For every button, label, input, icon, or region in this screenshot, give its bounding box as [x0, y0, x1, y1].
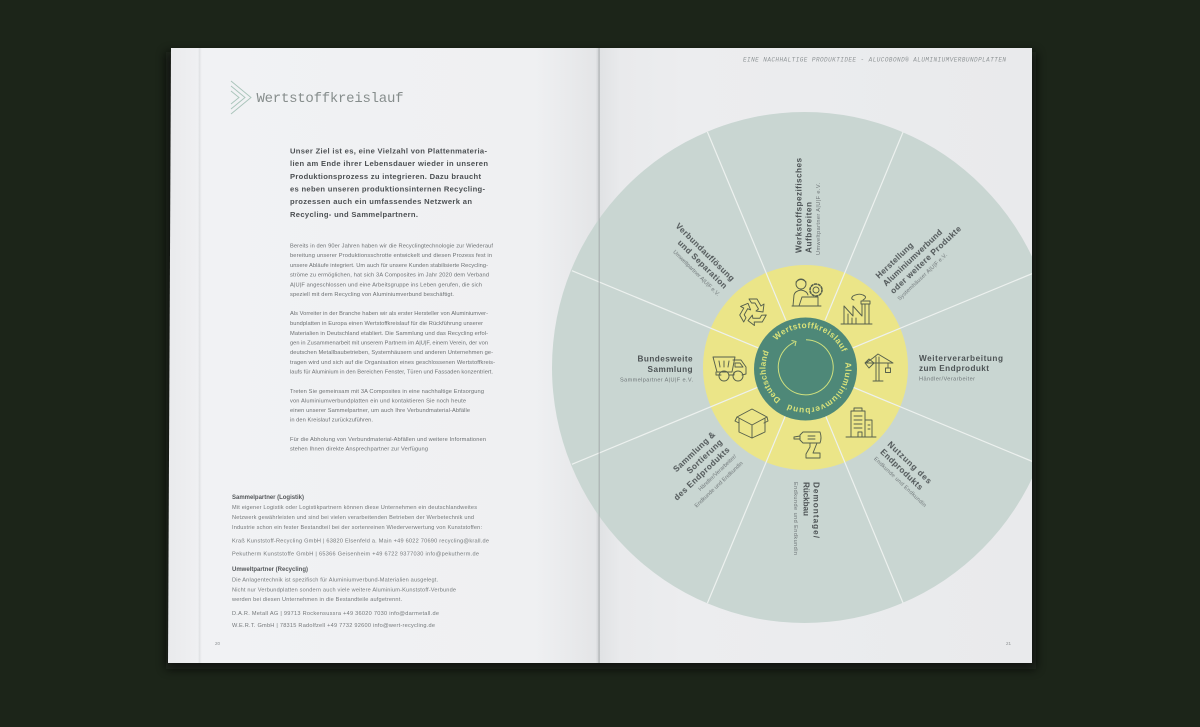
book spine [599, 48, 600, 663]
text block: lead paragraph: Produktionsprozess zu integrieren. Dazu braucht [290, 172, 481, 181]
text block: body copy: gen in Zusammenarbeit mit unserem Partnern im A|U|F, einem Verein, der von [290, 340, 488, 346]
ring label: Wertstoffkreislauf: Wertstoffkreislauf [772, 322, 848, 352]
icon: worker with gear [792, 279, 822, 306]
label: Demontage Rückbau: Demontage/ [812, 482, 820, 539]
label: Herstellung: Systemhäuser A|U|F e.V. [897, 252, 949, 302]
text block: Sammelpartner: Pekutherm Kunststoffe GmbH | 65366 Geisenheim +49 6722 9377030 info@pekutherm.de [232, 552, 479, 558]
text block: body copy: Bereits in den 90er Jahren haben wir die Recyclingtechnologie zur Wiederauf [290, 244, 493, 250]
text block: body copy: von Aluminiumverbundplatten ein und kontaktieren Sie noch heute [290, 398, 466, 404]
page number left: 20 [215, 641, 221, 646]
icon: office buildings [846, 408, 876, 437]
icon: recycling arrows [736, 299, 766, 328]
text block: lead paragraph: Recycling- und Sammelpartnern. [290, 210, 418, 219]
label: Herstellung: oder weitere Produkte [889, 224, 963, 296]
label: Sammlung und Sortierung: des Endprodukts [672, 445, 732, 502]
label: Nutzung des Endprodukts: Nutzung des [886, 440, 933, 486]
text block: body copy: speziell mit dem Recycling von Aluminiumverbund beschäftigt. [290, 292, 454, 298]
text block: Umweltpartner: werden bei diesen Unternehmen in die Bestandteile aufgetrennt. [231, 597, 402, 603]
label: Verbundauflösung und Separation [660, 222, 737, 298]
ring label: Deutschland: Deutschland [759, 350, 780, 404]
panel: left page [168, 48, 600, 663]
label: Herstellung: Aluminiumverbund [881, 228, 944, 288]
label: Demontage Rückbau: Endkunde und Endkundin [792, 482, 798, 555]
book shadow [166, 52, 1036, 669]
text block: Umweltpartner: W.E.R.T. GmbH | 78315 Radolfzell +49 7732 92600 info@wert-recycling.de [232, 623, 435, 629]
text block: body copy: Als Vorreiter in der Branche haben wir als erster Hersteller von Aluminiumver- [290, 311, 488, 317]
label: Nutzung des Endprodukts: Endprodukts [878, 448, 925, 492]
icon: factory [841, 294, 872, 324]
icon: cordless drill [794, 432, 821, 458]
label: Weiterverarbeitung: zum Endprodukt [919, 364, 989, 373]
text block: Umweltpartner: Nicht nur Verbundplatten sondern auch viele weitere Aluminium-Kunststoff-Verbunde [232, 588, 456, 594]
label: Bundesweite Sammlung [620, 354, 693, 384]
label: Bundesweite Sammlung: Bundesweite [638, 354, 693, 364]
text block: body copy: einen unserer Sammelpartner, um auch Ihre Verbundmaterial-Abfälle [290, 408, 470, 414]
text block: body copy [290, 244, 495, 452]
text block: Sammelpartner: Industrie schon ein fester Bestandteil bei der sortenreinen Wiederverwertung von Kunststoffen: [232, 525, 482, 531]
ring arrow [778, 340, 833, 395]
text block: Umweltpartner [231, 567, 456, 629]
text block: Umweltpartner: Umweltpartner (Recycling) [232, 567, 308, 573]
text block: body copy: A|U|F angeschlossen und eine Arbeitsgruppe ins Leben gerufen, die sich [290, 282, 482, 288]
label: Nutzung des Endprodukts: Endkunde und Endkundin [872, 456, 927, 509]
label: Verbundauflösung und Separation: Umweltpartner A|U|F e.V. [671, 249, 721, 298]
label: Werkstoffspezifisches Aufbereiten: Werkstoffspezifisches [794, 158, 804, 253]
text block: body copy: Für die Abholung von Verbundmaterial-Abfällen und weitere Informationen [290, 437, 486, 443]
icon: chevrons [231, 81, 251, 114]
label: Weiterverarbeitung: Händler/Verarbeiter [919, 376, 975, 382]
panel: right page [552, 48, 1032, 663]
label: Nutzung des Endprodukts [872, 440, 943, 509]
label: Werkstoffspezifisches Aufbereiten: Aufbereiten [804, 202, 814, 253]
label: Verbundauflösung und Separation: und Separation [676, 238, 729, 291]
text block: body copy: bereitung unserer Produktionsschrotte entwickelt und diesen Prozess fest in [290, 253, 492, 259]
label: Sammlung und Sortierung [658, 430, 745, 516]
text block: lead paragraph: prozessen auch ein umfassendes Netzwerk an [290, 197, 472, 206]
label: Werkstoffspezifisches Aufbereiten [794, 158, 822, 255]
label: Weiterverarbeitung: Weiterverarbeitung [919, 354, 1003, 363]
label: Sammlung und Sortierung: Sammlung & [672, 430, 717, 474]
text block: Sammelpartner [232, 495, 489, 558]
label: Bundesweite Sammlung: Sammlung [648, 365, 693, 374]
text block: lead paragraph: es neben unseren produktionsinternen Recycling- [290, 184, 485, 194]
heading: Wertstoffkreislauf [256, 91, 404, 107]
label: Verbundauflösung und Separation: Verbundauflösung [674, 222, 736, 283]
text block: body copy: stehen Ihnen direkte Ansprechpartner zur Verfügung [290, 446, 428, 452]
text block: body copy: tragen wird und sich auf die Organisation eines geschlossenen Wertstoffkreis- [290, 360, 495, 366]
text block: body copy: Treten Sie gemeinsam mit 3A Composites in eine nachhaltige Entsorgung [290, 389, 484, 395]
text block: lead paragraph: lien am Ende ihrer Lebensdauer wieder in unseren [290, 159, 488, 168]
text block: body copy: ströme zu ermöglichen, hat sich 3A Composites im Jahr 2020 dem Verband [290, 272, 489, 278]
text block: body copy: bundplatten in Europa einen Wertstoffkreislauf für die Rückführung unserer [290, 321, 483, 327]
label: Sammlung und Sortierung: Sortierung [685, 438, 725, 476]
label: Bundesweite Sammlung: Sammelpartner A|U|F e.V. [620, 378, 693, 384]
text block: Sammelpartner: Mit eigener Logistik oder Logistikpartnern können diese Unternehmen ein deutschlandweites [232, 505, 477, 511]
text block: body copy: Materialien in Deutschland etabliert. Die Sammlung und das Recycling erfol- [290, 331, 488, 337]
text block: Umweltpartner: D.A.R. Metall AG | 99713 Rockensussra +49 36020 7030 info@darmetall.de [232, 611, 439, 617]
label: Herstellung: Herstellung [874, 241, 915, 280]
icon: dump truck [713, 357, 746, 381]
running header: EINE NACHHALTIGE PRODUKTIDEE - ALUCOBOND® ALUMINIUMVERBUNDPLATTEN [743, 56, 1006, 64]
text block: body copy: unsere Abläufe integriert. Um auch für unsere Kunden stabilisierte Recycling- [290, 263, 488, 269]
page number right: 21 [1006, 641, 1012, 646]
label: Demontage Rückbau: Rückbau [802, 482, 810, 516]
label: Weiterverarbeitung [919, 354, 1003, 382]
label: Sammlung und Sortierung: Händler/Verarbeiter/ [698, 454, 738, 493]
text block: Sammelpartner: Sammelpartner (Logistik) [232, 495, 304, 501]
label: Herstellung [874, 209, 970, 302]
text block: lead paragraph [290, 146, 488, 219]
text block: body copy: deutschen Metallbaubetrieben, Systemhäusern und anderen Unternehmen ge- [290, 350, 493, 356]
label: Sammlung und Sortierung: Endkunde und Endkundin [694, 461, 745, 509]
ring label: Aluminiumverbund: Aluminiumverbund [786, 362, 852, 414]
text block: Sammelpartner: Kraß Kunststoff-Recycling GmbH | 63820 Elsenfeld a. Main +49 6022 70690 recycling@krall.de [232, 538, 489, 544]
text block: body copy: laufs für Aluminium in den Bereichen Fenster, Türen und Fassaden konzentriert. [290, 370, 493, 376]
chart: circular diagram [552, 112, 1057, 623]
text block: Umweltpartner: Die Anlagentechnik ist spezifisch für Aluminiumverbund-Materialien ausgelegt. [232, 578, 438, 584]
text block: lead paragraph: Unser Ziel ist es, eine Vielzahl von Plattenmateria- [290, 146, 487, 156]
icon: crane [865, 354, 893, 381]
text block: Sammelpartner: Netzwerk gewährleisten und sind bei vielen verarbeitenden Betrieben der Werbetechnik und [232, 515, 474, 521]
text block: body copy: in den Kreislauf zurückzuführen. [290, 418, 373, 424]
icon: open box [735, 409, 768, 438]
label: Werkstoffspezifisches Aufbereiten: Umweltpartner A|U|F e.V. [816, 183, 822, 255]
label: Demontage Rückbau [792, 482, 820, 555]
